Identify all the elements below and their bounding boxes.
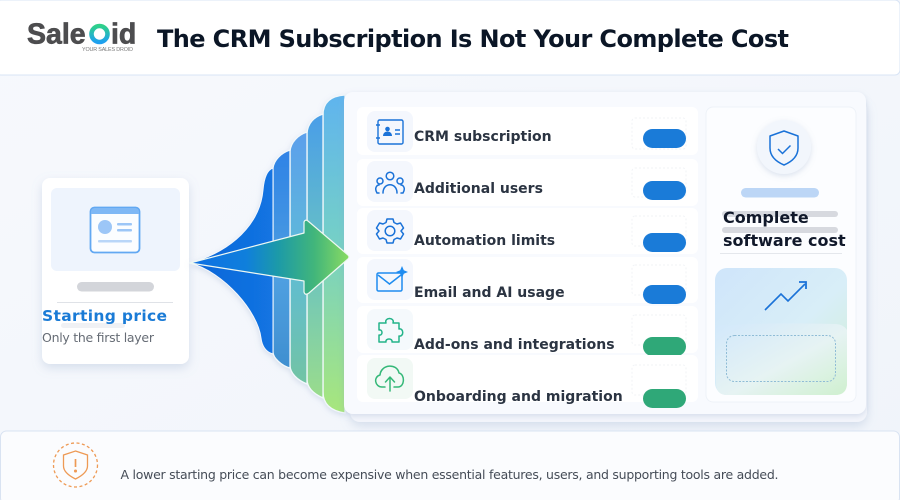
logo: Sale [27,18,86,50]
heading: complete software cost: software cost [723,231,846,250]
row: CRM subscription: CRM subscription [414,129,552,145]
chart panel [715,268,847,395]
row: CRM subscription [357,107,698,155]
row: Email and AI usage: Email and AI usage [414,285,565,301]
title: The CRM Subscription Is Not Your Complete Cost [157,25,789,53]
footer note [0,431,900,500]
logo: id [111,18,136,50]
row: Additional users [357,159,698,206]
row: Onboarding and migration: Onboarding and migration [414,389,623,405]
icon: trend arrow [765,282,806,310]
icon: puzzle [379,318,403,342]
row: Onboarding and migration [357,355,698,408]
row: Add-ons and integrations: Add-ons and integrations [414,337,615,353]
panel: cost layers [344,92,867,422]
row: Email and AI usage [357,257,698,304]
icon: profile card [90,208,140,252]
icon: shield check [757,120,811,174]
footer text: A lower starting price can become expensive when essential features, users, and supporting tools are added. [120,467,778,482]
icon: gear [376,219,404,243]
row: Additional users: Additional users [414,181,543,197]
icon: warning shield [54,443,98,487]
icon: cloud upload [376,366,403,391]
heading: complete software cost: Complete [723,208,809,227]
logo: YOUR SALES DROID [82,47,133,53]
card: starting price [42,178,189,364]
header bar [0,0,900,75]
arrow [190,220,349,294]
logo [27,18,136,53]
card: complete software cost [706,107,856,402]
heading: starting price: Starting price [42,307,167,325]
row: Add-ons and integrations [357,306,698,356]
layered strips and funnel [190,95,345,413]
text: first layer: Only the first layer [42,330,155,345]
icon: users [376,172,404,193]
row: Automation limits: Automation limits [414,233,555,249]
icon: email sparkle [377,266,408,291]
row: Automation limits [357,208,698,254]
icon: contact book [376,120,403,144]
